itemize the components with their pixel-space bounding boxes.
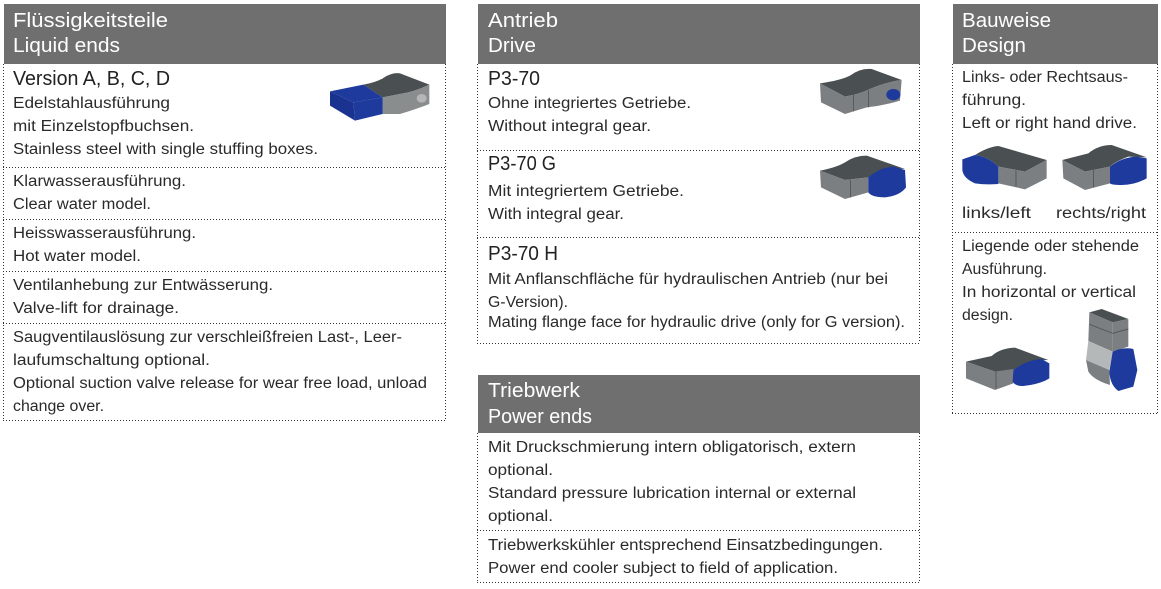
text block: clear water: Clear water model. (13, 196, 151, 213)
text block: P3-70 H: Mit Anflanschfläche für hydraulischen Antrieb (nur bei (488, 271, 888, 288)
text block: suction valve release: laufumschaltung optional. (13, 352, 210, 369)
text block: left or right hand drive (962, 69, 1137, 132)
text block: lubrication: optional. (488, 462, 553, 479)
text block: hot water: Hot water model. (13, 248, 141, 265)
text block: power end cooler: Triebwerkskühler entsprechend Einsatzbedingungen. (488, 537, 883, 554)
text block: valve lift: Ventilanhebung zur Entwässerung. (13, 277, 273, 294)
panel: power ends (477, 375, 920, 582)
text block: power end cooler (488, 537, 883, 577)
icon: right hand drive (1062, 145, 1147, 190)
text block: version A, B, C, D: mit Einzelstopfbuchsen. (13, 118, 194, 135)
text block: clear water: Klarwasserausführung. (13, 173, 186, 190)
text block: P3-70: P3-70 (488, 68, 540, 90)
text block: P3-70 H: P3-70 H (488, 243, 558, 265)
text block: P3-70 G: Mit integriertem Getriebe. (488, 183, 684, 200)
text block: P3-70 H: Mating flange face for hydraulic drive (only for G version). (488, 314, 905, 331)
heading: drive: Antrieb (488, 10, 558, 32)
text block: power end cooler: Power end cooler subject to field of application. (488, 560, 838, 577)
heading: drive: Drive (488, 35, 536, 57)
text block: P3-70 H: G-Version). (488, 294, 568, 311)
text block: clear water (13, 173, 186, 213)
text block: horizontal or vertical design: design. (962, 307, 1013, 324)
text block: hot water (13, 225, 196, 265)
text block: P3-70 G: P3-70 G (488, 153, 556, 175)
text block: hot water: Heisswasserausführung. (13, 225, 196, 242)
text block: P3-70 G: With integral gear. (488, 206, 624, 223)
text block: suction valve release: Optional suction valve release for wear free load, unload (13, 375, 427, 392)
heading: power ends: Power ends (488, 406, 592, 428)
heading: drive (478, 4, 920, 64)
heading: liquid ends: Flüssigkeitsteile (13, 10, 168, 32)
text block: version A, B, C, D: Stainless steel with single stuffing boxes. (13, 141, 318, 158)
text block: P3-70 H (488, 243, 905, 331)
text block: valve lift: Valve-lift for drainage. (13, 300, 179, 317)
panel: drive (477, 4, 920, 344)
text block: P3-70 G (488, 153, 684, 223)
panel: design (952, 4, 1158, 414)
icon: liquid end pump (330, 73, 429, 121)
panel: liquid ends (3, 4, 446, 420)
label: links/left: links/left (962, 205, 1032, 222)
text block: P3-70: Without integral gear. (488, 118, 651, 135)
heading: design: Design (962, 35, 1026, 57)
text block: P3-70 (488, 68, 691, 135)
text block: horizontal or vertical design: In horizontal or vertical (962, 284, 1136, 301)
text block: version A, B, C, D: Version A, B, C, D (13, 68, 170, 90)
heading: design (953, 4, 1158, 64)
text block: suction valve release (13, 329, 427, 415)
text block: lubrication: Mit Druckschmierung intern obligatorisch, extern (488, 439, 856, 456)
text block: horizontal or vertical design: Ausführung. (962, 261, 1047, 278)
heading: liquid ends (4, 4, 446, 64)
icon: pump without gear (820, 69, 902, 114)
text block: lubrication: Standard pressure lubrication internal or external (488, 485, 856, 502)
text block: suction valve release: change over. (13, 398, 104, 415)
text block: lubrication (488, 439, 856, 525)
icon: left hand drive (962, 146, 1047, 189)
text block: left or right hand drive: führung. (962, 92, 1026, 109)
label: rechts/right: rechts/right (1056, 205, 1147, 222)
heading: power ends: Triebwerk (488, 380, 581, 402)
text block: P3-70: Ohne integriertes Getriebe. (488, 95, 691, 112)
icon: horizontal pump (966, 348, 1049, 390)
heading: power ends (478, 375, 920, 433)
text block: horizontal or vertical design (962, 238, 1139, 324)
heading: design: Bauweise (962, 10, 1051, 32)
heading: liquid ends: Liquid ends (13, 35, 120, 57)
text block: version A, B, C, D: Edelstahlausführung (13, 95, 170, 112)
text block: horizontal or vertical design: Liegende oder stehende (962, 238, 1139, 255)
text block: suction valve release: Saugventilauslösung zur verschleißfreien Last-, Leer- (13, 329, 402, 346)
icon: pump with integral gear (820, 156, 906, 199)
icon: vertical pump (1086, 309, 1137, 391)
text block: version A, B, C, D (13, 68, 318, 158)
text block: valve lift (13, 277, 273, 317)
text block: left or right hand drive: Links- oder Rechtsaus- (962, 69, 1128, 86)
text block: lubrication: optional. (488, 508, 553, 525)
text block: left or right hand drive: Left or right hand drive. (962, 115, 1137, 132)
